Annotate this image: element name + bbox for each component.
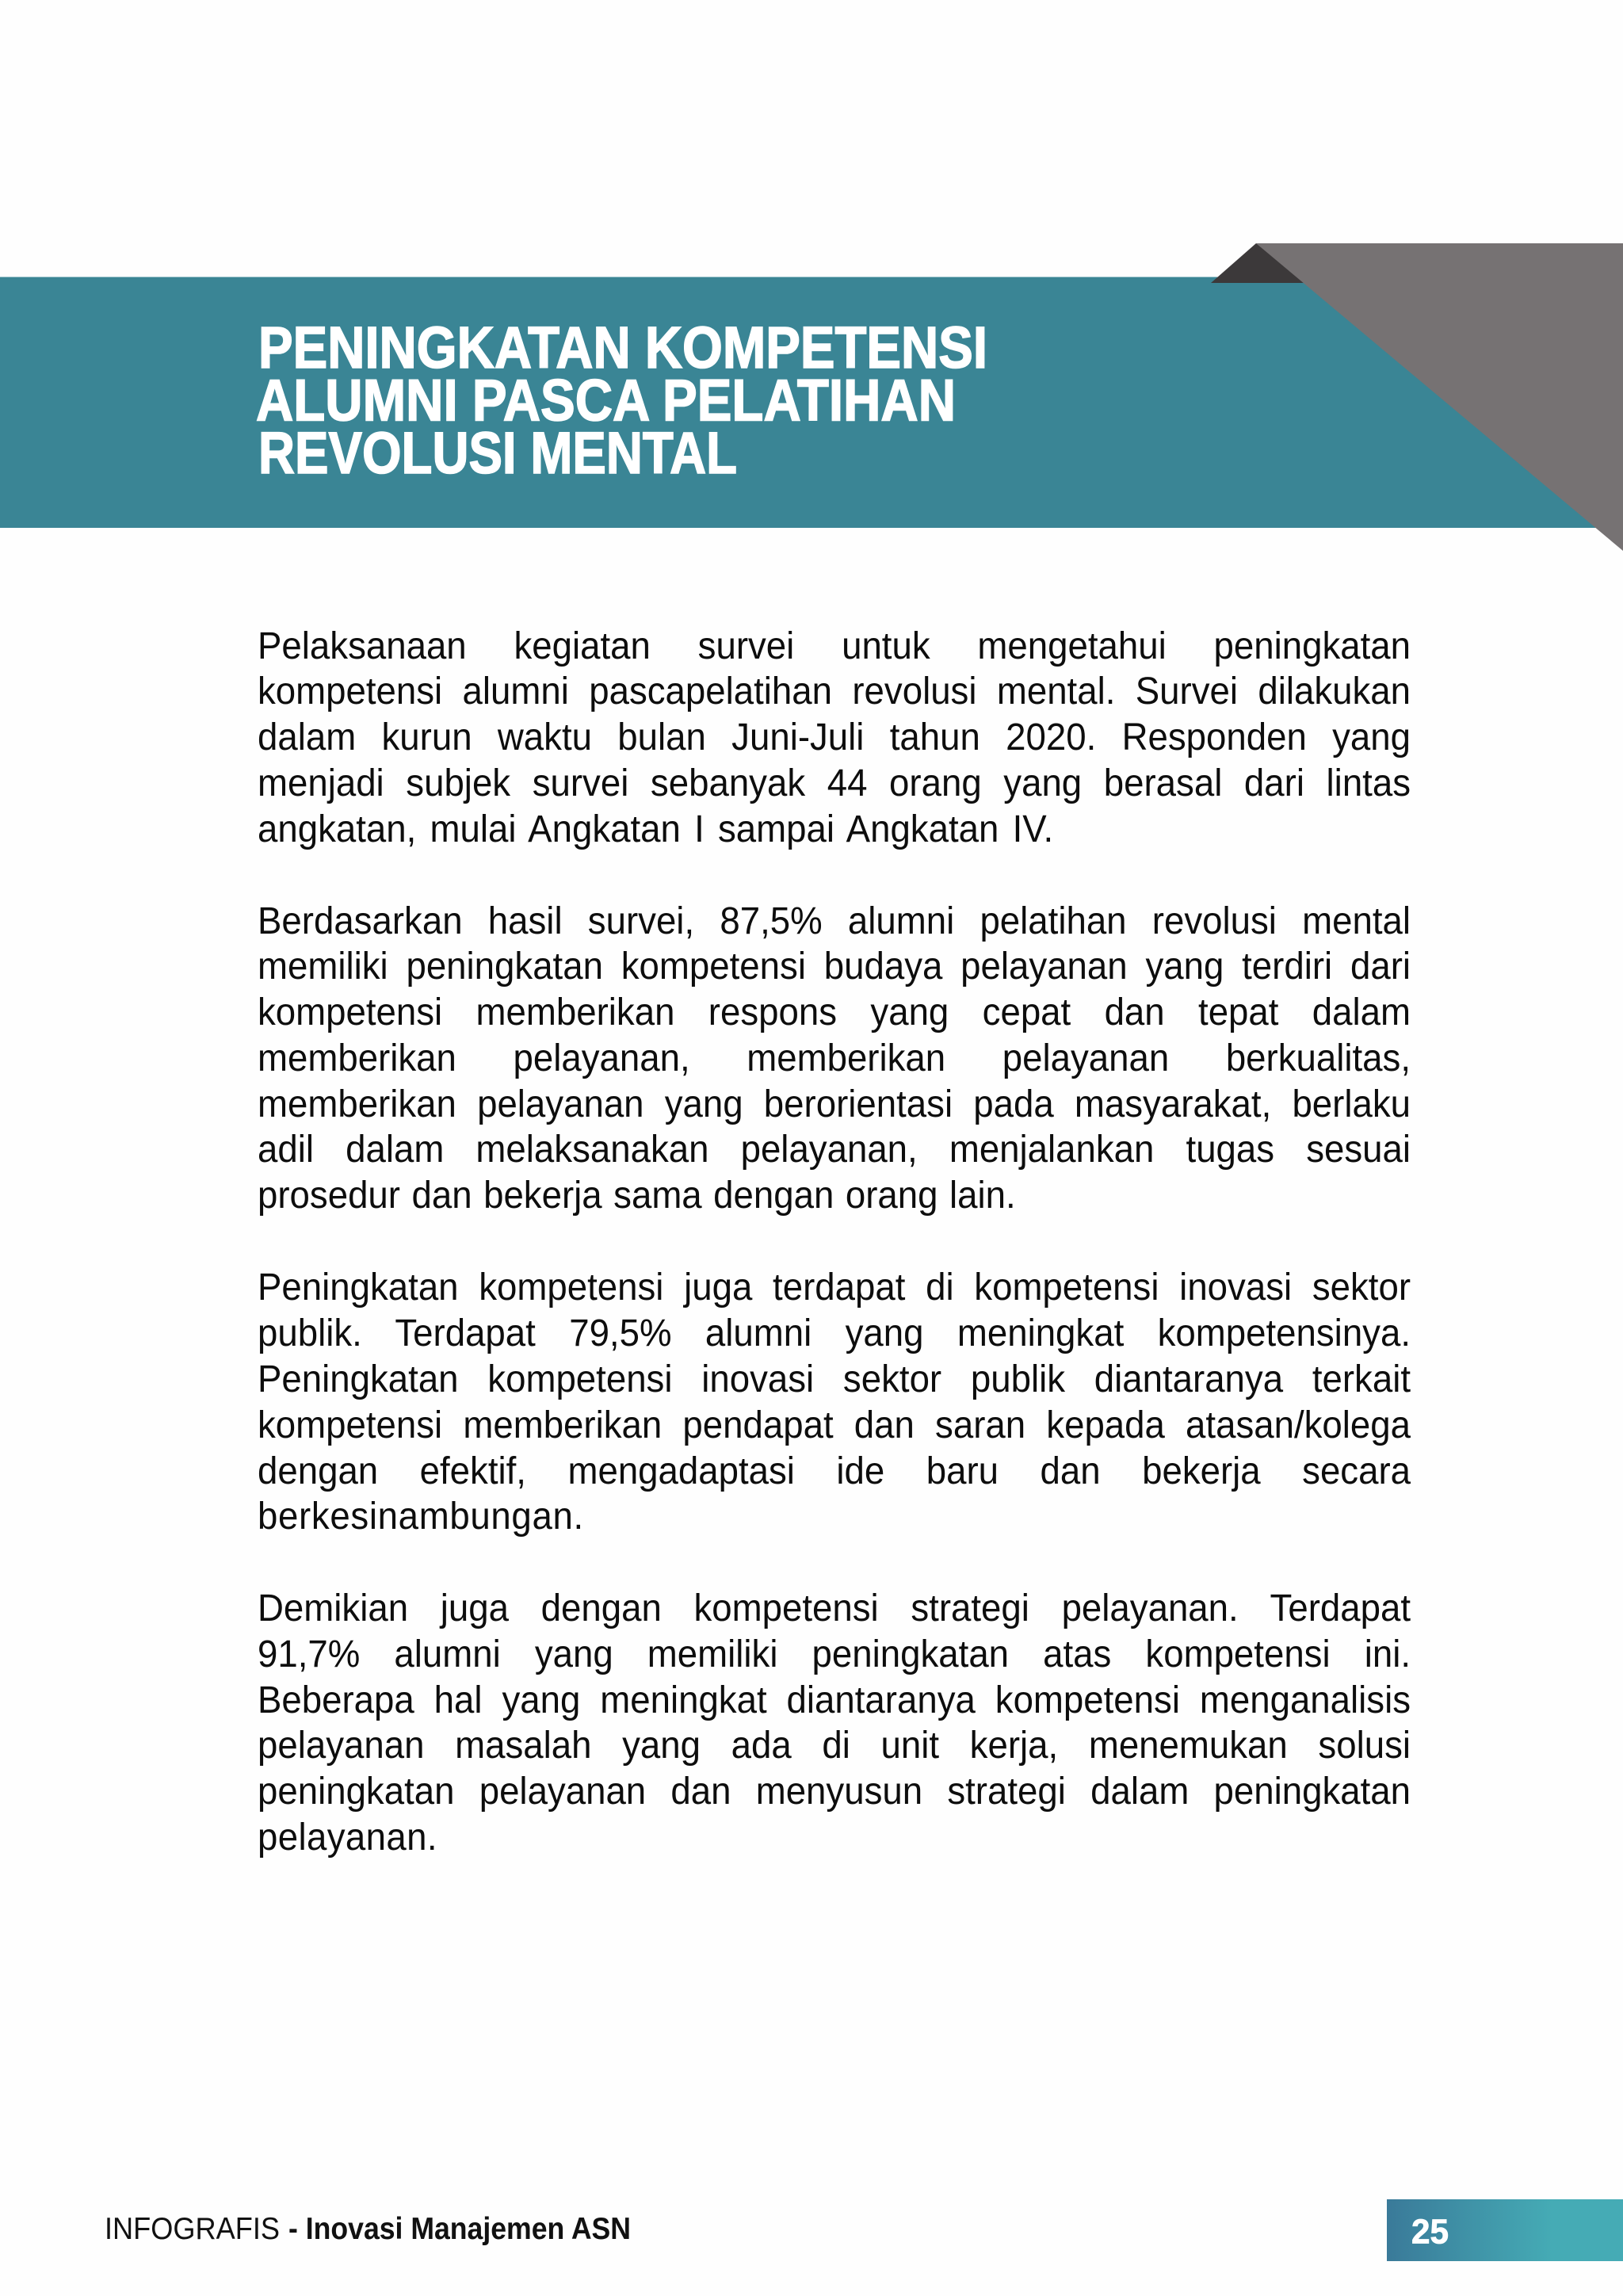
title: PENINGKATAN KOMPETENSI [258,315,987,380]
paragraph: public sector innovation competency: kompetensi memberikan pendapat dan saran kepada atasan/kolega [258,1404,1411,1446]
paragraph: public sector innovation competency: dengan efektif, mengadaptasi ide baru dan bekerja secara [258,1450,1411,1492]
page number box: 25 [1411,2213,1449,2252]
paragraph: public sector innovation competency [258,1266,1411,1538]
paragraph: service culture competency: memberikan pelayanan yang berorientasi pada masyarakat, berlaku [258,1083,1411,1125]
footer label: - Inovasi Manajemen ASN [288,2212,631,2246]
paragraph: survey overview: kompetensi alumni pascapelatihan revolusi mental. Survei dilakukan [258,670,1411,712]
corner ribbon: gray triangle [1256,243,1623,551]
paragraph: survey overview: dalam kurun waktu bulan Juni-Juli tahun 2020. Responden yang [258,716,1411,758]
paragraph: public sector innovation competency: publik. Terdapat 79,5% alumni yang meningkat kompetensinya. [258,1312,1411,1354]
paragraph: service strategy competency: pelayanan. [258,1817,437,1859]
title: REVOLUSI MENTAL [258,420,737,486]
paragraph: service culture competency [258,900,1411,1217]
paragraph: service strategy competency [258,1587,1411,1859]
paragraph: public sector innovation competency: Peningkatan kompetensi juga terdapat di kompetensi inovasi sektor [258,1266,1411,1308]
paragraph: public sector innovation competency: berkesinambungan. [258,1496,584,1538]
title [256,315,987,486]
paragraph: survey overview: menjadi subjek survei sebanyak 44 orang yang berasal dari lintas [258,762,1411,804]
paragraph: survey overview [258,625,1411,850]
paragraph: service culture competency: kompetensi memberikan respons yang cepat dan tepat dalam [258,991,1411,1033]
paragraph: service strategy competency: peningkatan pelayanan dan menyusun strategi dalam peningkatan [258,1771,1411,1813]
paragraph: service culture competency: memberikan pelayanan, memberikan pelayanan berkualitas, [258,1037,1411,1079]
paragraph: service culture competency: Berdasarkan hasil survei, 87,5% alumni pelatihan revolusi mental [258,900,1411,942]
corner fold: dark triangle [1211,243,1308,283]
title: ALUMNI PASCA PELATIHAN [256,368,956,434]
header banner [0,243,1623,551]
paragraph: public sector innovation competency: Peningkatan kompetensi inovasi sektor publik diantaranya terkait [258,1358,1411,1400]
footer label [105,2212,631,2246]
paragraph: service culture competency: memiliki peningkatan kompetensi budaya pelayanan yang terdiri dari [258,946,1411,988]
paragraph: service culture competency: prosedur dan bekerja sama dengan orang lain. [258,1175,1016,1217]
footer label: INFOGRAFIS [105,2212,280,2246]
paragraph: service strategy competency: pelayanan masalah yang ada di unit kerja, menemukan solusi [258,1725,1411,1767]
paragraph: service strategy competency: 91,7% alumni yang memiliki peningkatan atas kompetensi ini. [258,1633,1411,1675]
paragraph: service strategy competency: Beberapa hal yang meningkat diantaranya kompetensi menganalisis [258,1679,1411,1721]
banner: teal band [0,277,1623,528]
paragraph: survey overview: angkatan, mulai Angkatan I sampai Angkatan IV. [258,808,1053,850]
paragraph: survey overview: Pelaksanaan kegiatan survei untuk mengetahui peningkatan [258,625,1411,667]
paragraph: service culture competency: adil dalam melaksanakan pelayanan, menjalankan tugas sesuai [258,1129,1411,1171]
page number box [1387,2199,1623,2261]
paragraph: service strategy competency: Demikian juga dengan kompetensi strategi pelayanan. Terdapat [258,1587,1411,1629]
